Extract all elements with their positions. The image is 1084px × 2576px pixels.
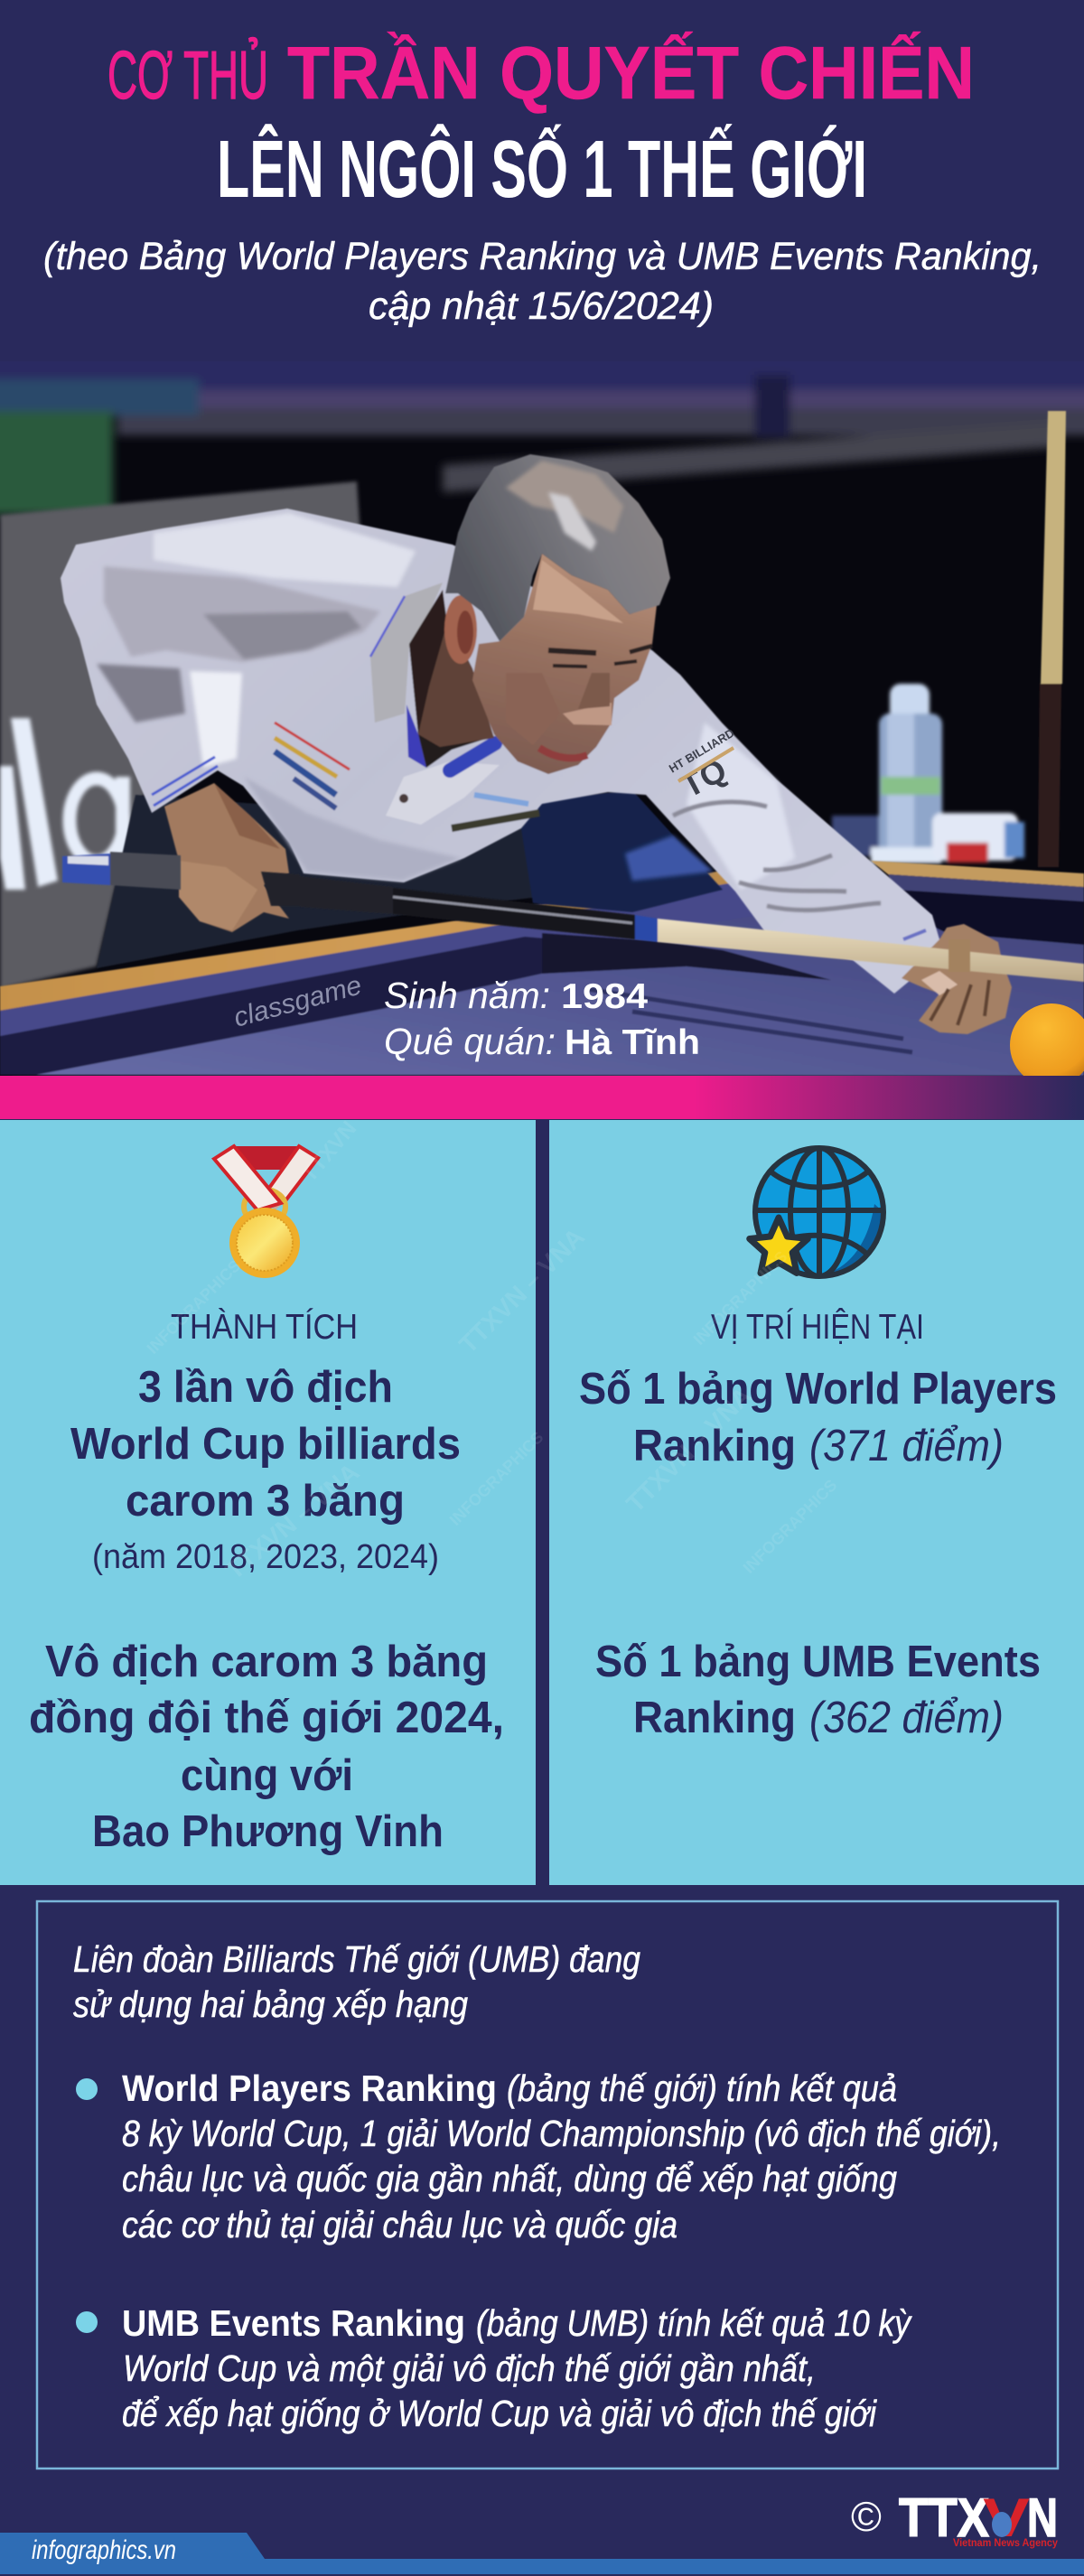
position: UMB Events Ranking: Ranking bbox=[633, 1694, 796, 1742]
title line 1: player name: CƠ THỦ bbox=[107, 37, 268, 113]
UMB Events Ranking description bbox=[122, 2302, 912, 2434]
hair bbox=[445, 454, 670, 641]
position: World Players Ranking: Số 1 bảng World Players bbox=[579, 1365, 1057, 1414]
text: INFOGRAPHICS bbox=[740, 1476, 840, 1577]
logo on sleeve: HT BILLIARD bbox=[667, 726, 736, 776]
World Players Ranking description: các cơ thủ tại giải châu lục và quốc gia bbox=[122, 2204, 678, 2245]
achievement: World Cup titles: carom 3 băng bbox=[126, 1477, 405, 1526]
UMB Events Ranking description: để xếp hạt giống ở World Cup và giải vô địch thế giới bbox=[122, 2393, 878, 2434]
chest logos bbox=[275, 723, 539, 828]
forearm folds bbox=[673, 802, 881, 910]
banner letters bbox=[0, 718, 130, 890]
text: TTXVN bbox=[297, 1116, 361, 1187]
copyright and TTXVN logo: © bbox=[851, 2493, 882, 2540]
birth year and hometown: Hà Tĩnh bbox=[565, 1023, 700, 1062]
site address: infographics.vn bbox=[32, 2535, 176, 2565]
UMB Events Ranking description: World Cup và một giải vô địch thế giới gần nhất, bbox=[123, 2347, 816, 2389]
title bbox=[107, 31, 975, 215]
info box: UMB rankings explanation bbox=[37, 1901, 1058, 2469]
panel heading: VỊ TRÍ HIỆN TẠI bbox=[711, 1308, 924, 1347]
achievement: team world title: Bao Phương Vinh bbox=[92, 1807, 444, 1856]
achievement: team world title bbox=[29, 1638, 504, 1856]
gradient divider bar bbox=[0, 1076, 1084, 1119]
photo background: arena bbox=[0, 352, 1084, 515]
position: UMB Events Ranking: (362 điểm) bbox=[809, 1694, 1004, 1742]
face bbox=[472, 554, 657, 774]
copyright and TTXVN logo: N bbox=[1027, 2487, 1058, 2548]
panel: current position bbox=[549, 1120, 1084, 1885]
copyright and TTXVN logo: V bbox=[983, 2487, 1030, 2548]
achievement: World Cup titles bbox=[70, 1363, 461, 1576]
subtitle bbox=[43, 235, 1042, 328]
UMB Events Ranking description: UMB Events Ranking bbox=[122, 2302, 465, 2344]
text: TTXVN – VNA bbox=[621, 1382, 757, 1517]
footer band with site tab bbox=[0, 2533, 1084, 2574]
copyright and TTXVN logo: Vietnam News Agency bbox=[953, 2536, 1058, 2549]
photo: player leaning over billiard table bbox=[0, 352, 1084, 1087]
pants and dark background behind torso bbox=[97, 790, 723, 968]
position: UMB Events Ranking: Số 1 bảng UMB Events bbox=[595, 1638, 1041, 1686]
bullet 1 bbox=[76, 2078, 98, 2100]
sleeve cuff bbox=[152, 757, 218, 806]
panel heading: THÀNH TÍCH bbox=[171, 1308, 358, 1347]
position: World Players Ranking: (371 điểm) bbox=[809, 1422, 1004, 1470]
panel: achievements bbox=[0, 1120, 536, 1885]
achievement: World Cup titles: (năm 2018, 2023, 2024) bbox=[92, 1538, 439, 1576]
logo on sleeve bbox=[668, 730, 734, 795]
birth year and hometown: 1984 bbox=[561, 977, 648, 1016]
birth year and hometown: Sinh năm: bbox=[384, 975, 550, 1016]
cue bbox=[62, 852, 1084, 982]
left hand bbox=[164, 783, 289, 932]
bullet 2 bbox=[76, 2311, 98, 2333]
intro text: Liên đoàn Billiards Thế giới (UMB) đang bbox=[73, 1938, 640, 1980]
text: INFOGRAPHICS bbox=[446, 1428, 547, 1529]
text: INFOGRAPHICS bbox=[144, 1256, 244, 1358]
World Players Ranking description: châu lục và quốc gia gần nhất, dùng để xếp hạt giống bbox=[122, 2158, 897, 2199]
gray sponsor banner bbox=[0, 481, 363, 989]
achievement: team world title: đồng đội thế giới 2024, bbox=[29, 1694, 504, 1742]
intro text bbox=[73, 1938, 640, 2025]
copyright and TTXVN logo bbox=[851, 2487, 1058, 2549]
achievement: team world title: cùng với bbox=[181, 1751, 353, 1800]
text: TTXVN – VNA bbox=[453, 1223, 590, 1358]
subtitle: (theo Bảng World Players Ranking và UMB Events Ranking, bbox=[43, 235, 1042, 278]
copyright and TTXVN logo: TTX bbox=[899, 2487, 989, 2548]
collar and placket bbox=[370, 583, 443, 723]
cue ball bbox=[1010, 1003, 1084, 1076]
World Players Ranking description: (bảng thế giới) tính kết quả bbox=[507, 2067, 897, 2109]
billiard table bbox=[0, 861, 1084, 1076]
text: INFOGRAPHICS bbox=[690, 1247, 790, 1349]
text: TTXVN – VNA bbox=[220, 1458, 364, 1585]
far cue stick bbox=[1038, 411, 1066, 867]
title line 1: player name: TRẦN QUYẾT CHIẾN bbox=[287, 31, 975, 115]
World Players Ranking description bbox=[122, 2067, 1001, 2245]
logo on table rail: classgame bbox=[230, 970, 365, 1033]
position: World Players Ranking bbox=[579, 1365, 1057, 1470]
World Players Ranking description: World Players Ranking bbox=[122, 2067, 497, 2109]
intro text: sử dụng hai bảng xếp hạng bbox=[73, 1983, 468, 2025]
neck bbox=[410, 632, 495, 748]
water bottle and table items bbox=[832, 684, 1024, 863]
achievement: World Cup titles: 3 lần vô địch bbox=[138, 1363, 393, 1412]
position: UMB Events Ranking bbox=[595, 1638, 1041, 1742]
achievement: team world title: Vô địch carom 3 băng bbox=[45, 1638, 488, 1686]
birth year and hometown bbox=[384, 975, 700, 1062]
UMB Events Ranking description: (bảng UMB) tính kết quả 10 kỳ bbox=[476, 2302, 912, 2344]
icon: gold medal bbox=[214, 1146, 318, 1278]
birth year and hometown: Quê quán: bbox=[384, 1021, 556, 1062]
player shirt bbox=[61, 454, 1012, 1034]
subtitle: cập nhật 15/6/2024) bbox=[369, 285, 714, 328]
icon: globe with star bbox=[750, 1147, 883, 1277]
logo on sleeve: TQ bbox=[676, 751, 733, 805]
shirt shading bbox=[97, 513, 795, 890]
position: World Players Ranking: Ranking bbox=[633, 1422, 796, 1470]
right bridge hand bbox=[902, 924, 1012, 1034]
achievement: World Cup titles: World Cup billiards bbox=[70, 1420, 461, 1469]
